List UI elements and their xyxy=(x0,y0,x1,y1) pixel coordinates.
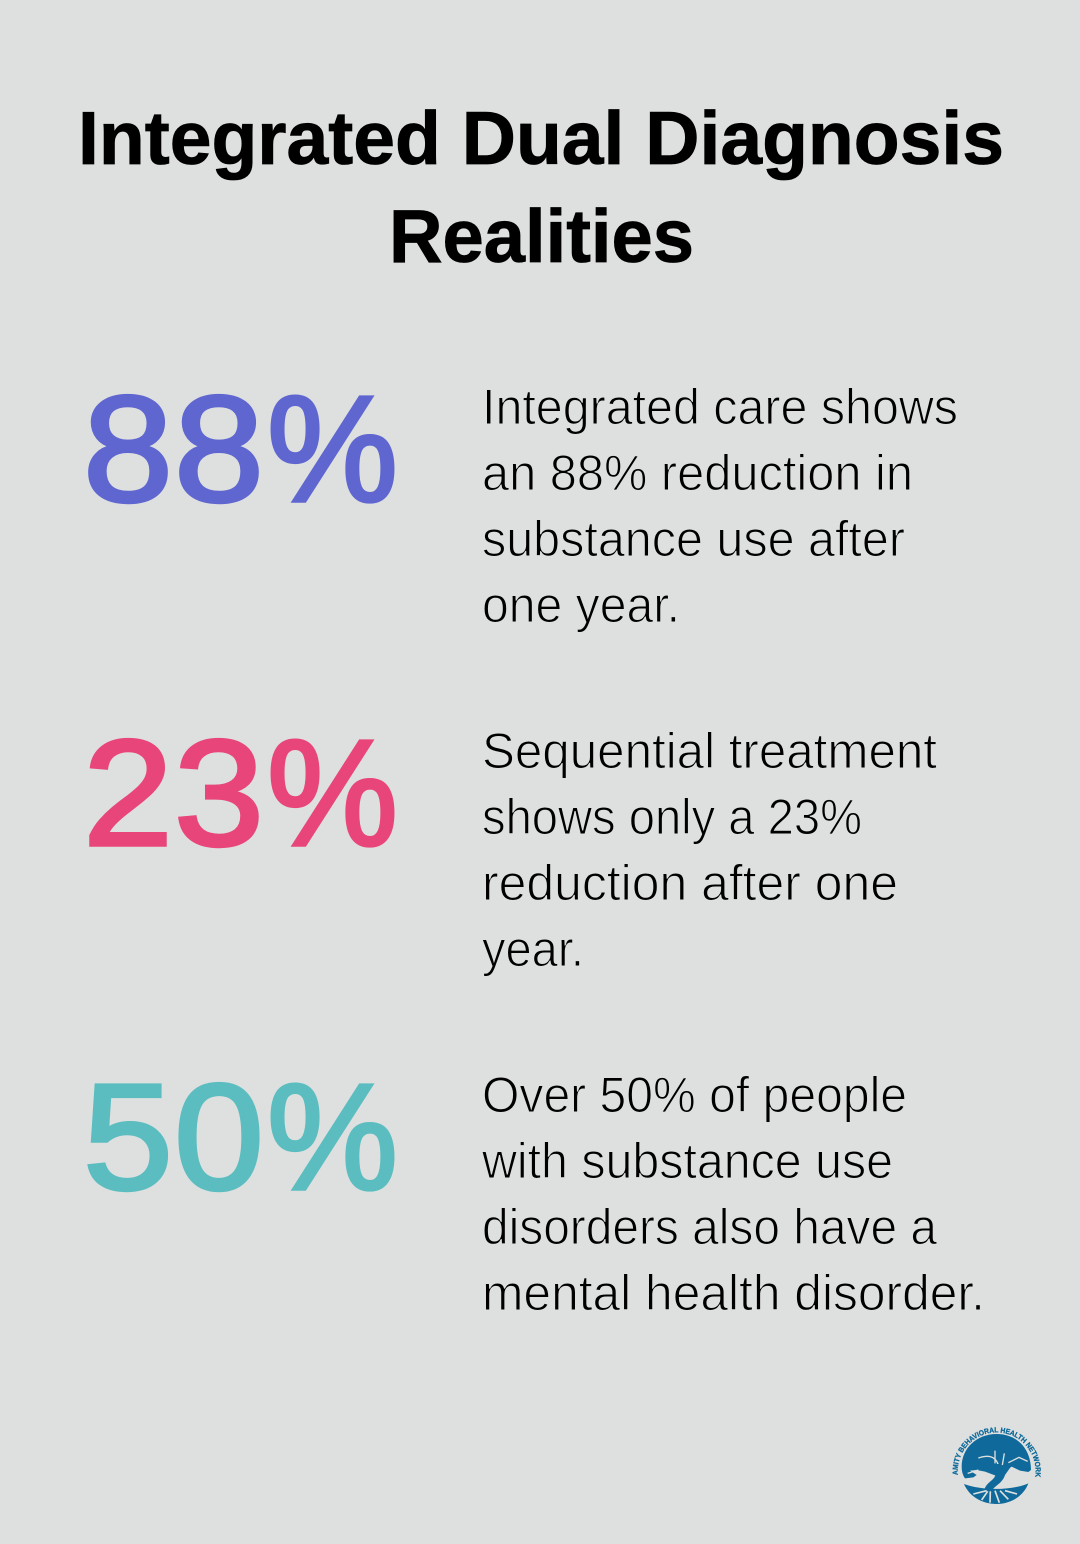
stat: 88% xyxy=(83,364,398,533)
stat: 88%: 8 xyxy=(174,364,264,533)
title: Realities xyxy=(389,194,694,278)
text block: co-occurring disorders: Over 50% of people xyxy=(482,1067,907,1123)
text block: integrated care xyxy=(482,379,958,633)
stat: 23%: % xyxy=(267,708,398,877)
stat: 23%: 3 xyxy=(174,708,264,877)
stat: 50%: 0 xyxy=(174,1052,264,1221)
text block: sequential treatment: Sequential treatment xyxy=(482,723,937,779)
stat: 50%: % xyxy=(267,1052,398,1221)
title xyxy=(78,96,1004,278)
text block: integrated care: one year. xyxy=(482,577,680,633)
title: Integrated Dual Diagnosis xyxy=(78,96,1004,180)
text block: sequential treatment: reduction after one xyxy=(482,855,898,911)
text block: integrated care: substance use after xyxy=(482,511,905,567)
text block: sequential treatment xyxy=(482,723,937,977)
text block: co-occurring disorders: disorders also have a xyxy=(482,1199,937,1255)
stat: 88%: 8 xyxy=(83,364,173,533)
icon: logo tree xyxy=(952,1427,1041,1504)
text block: co-occurring disorders: with substance use xyxy=(481,1133,893,1189)
stat: 50%: 5 xyxy=(83,1052,173,1221)
stat: 88%: % xyxy=(267,364,398,533)
text block: co-occurring disorders: mental health disorder. xyxy=(482,1265,985,1321)
text block: co-occurring disorders xyxy=(481,1067,985,1321)
text block: integrated care: Integrated care shows xyxy=(482,379,958,435)
stat: 23%: 2 xyxy=(83,708,173,877)
stat: 50% xyxy=(83,1052,398,1221)
text block: sequential treatment: year. xyxy=(482,921,584,977)
stat: 23% xyxy=(83,708,398,877)
text block: sequential treatment: shows only a 23% xyxy=(482,789,862,845)
text block: integrated care: an 88% reduction in xyxy=(482,445,913,501)
icon: logo tree: AMITY BEHAVIORAL HEALTH NETWORK xyxy=(952,1427,1041,1478)
